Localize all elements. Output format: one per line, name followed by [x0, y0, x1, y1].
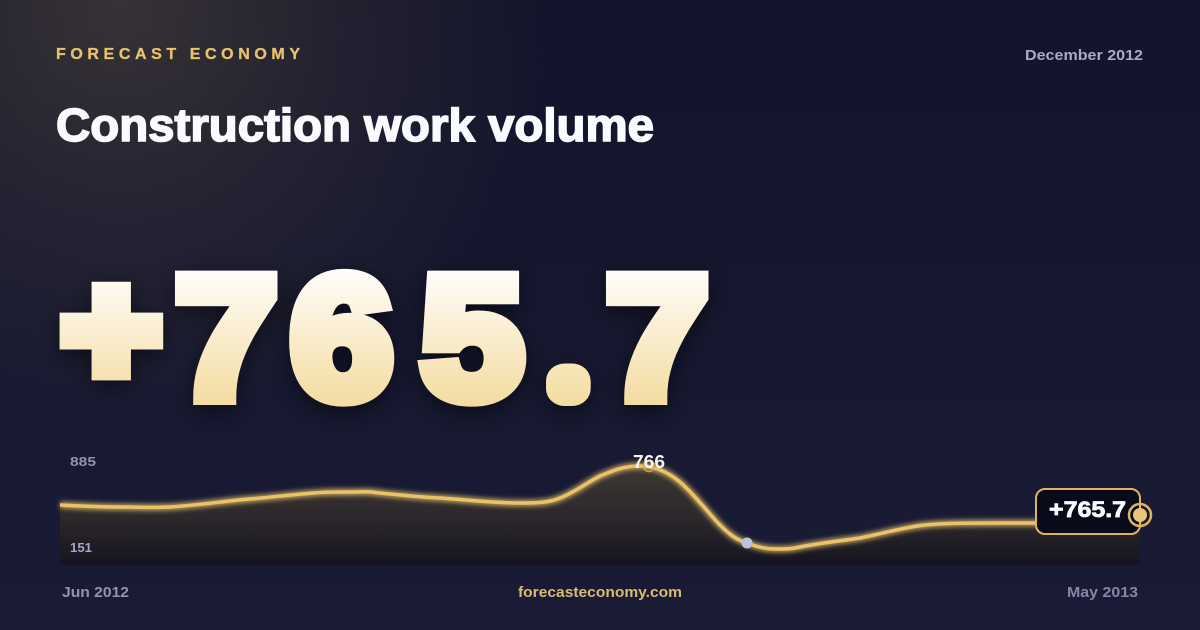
chart line — [60, 466, 1140, 549]
brand label: FORECAST ECONOMY — [56, 46, 300, 63]
chart area fill — [60, 466, 1140, 565]
peak label: 766 — [633, 452, 665, 472]
low marker — [742, 538, 752, 548]
title: Construction work volume — [56, 99, 654, 151]
big value — [63, 242, 708, 434]
big value: 7 — [607, 242, 708, 434]
big value: 7 — [176, 242, 277, 434]
website: forecasteconomy.com — [518, 584, 682, 601]
big value: 6 — [291, 242, 392, 434]
value callout — [1036, 489, 1140, 534]
axis max label: 885 — [70, 454, 96, 469]
start date: Jun 2012 — [62, 584, 129, 601]
big value: . — [561, 343, 576, 399]
date: December 2012 — [1025, 47, 1143, 64]
value callout: +765.7 — [1049, 497, 1126, 522]
axis min label: 151 — [70, 540, 92, 555]
end marker — [1129, 504, 1151, 526]
peak marker — [644, 460, 654, 472]
big value: + — [63, 242, 159, 416]
end date: May 2013 — [1067, 584, 1138, 601]
line chart — [60, 452, 1151, 565]
big value: 5 — [422, 242, 523, 434]
chart line glow — [60, 466, 1140, 549]
